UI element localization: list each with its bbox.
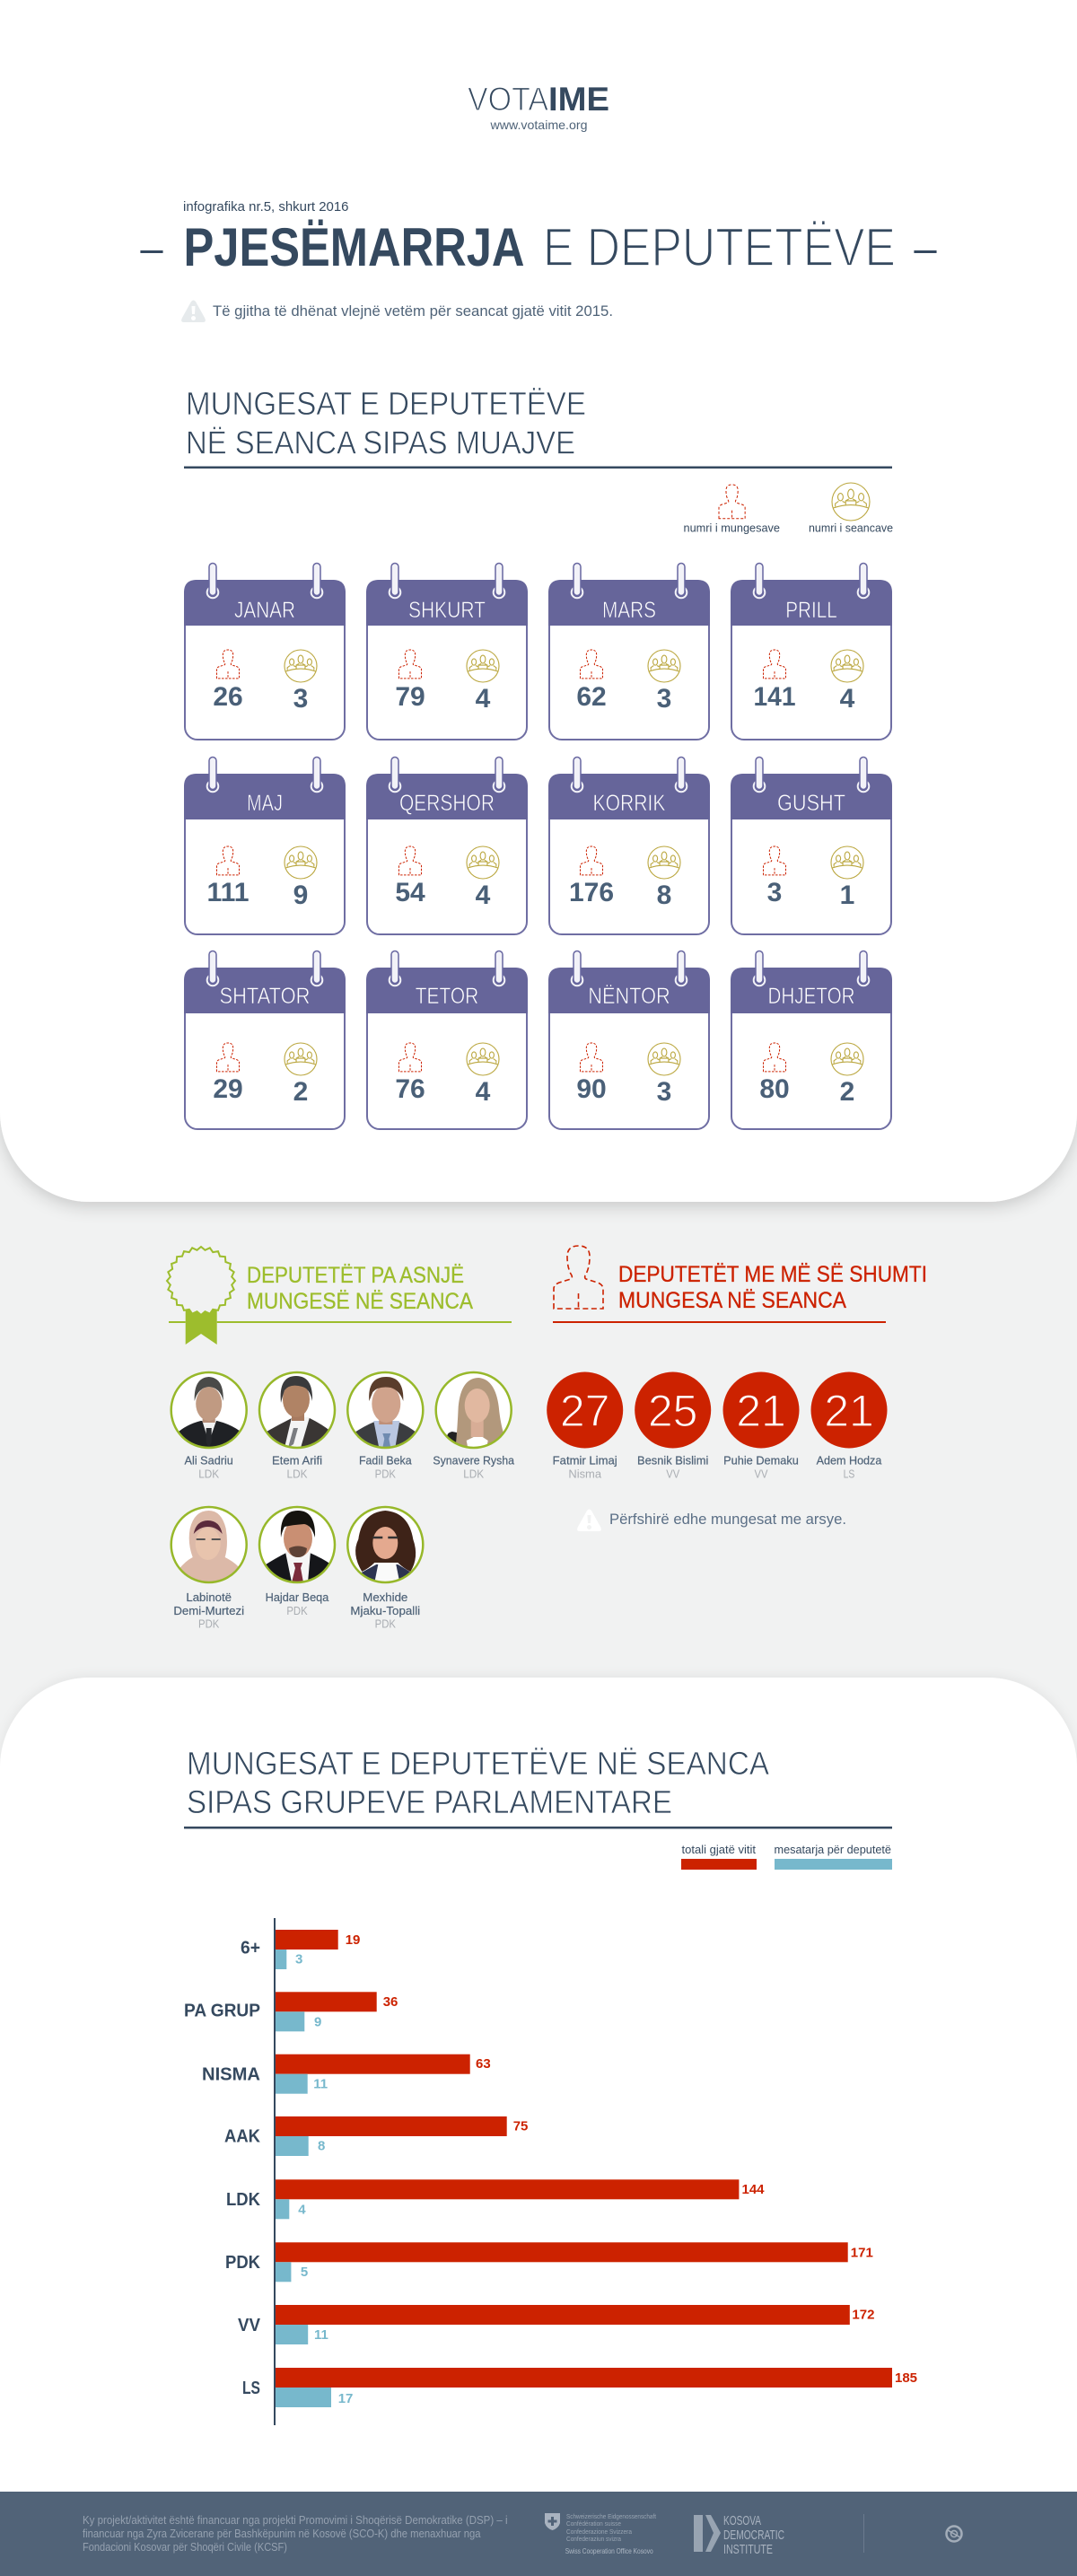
axis bbox=[274, 1918, 276, 2425]
calendar: SHKURT: SHKURT bbox=[408, 598, 486, 623]
calendar: KORRIK bbox=[548, 758, 710, 934]
icon: award rosette with ribbon bbox=[167, 1247, 512, 1345]
logo: Swiss Cooperation Office: Confédération suisse bbox=[566, 2521, 621, 2528]
badge: Besnik Bislimi 25 bbox=[635, 1371, 711, 1481]
names: second row bbox=[173, 1590, 420, 1630]
bars: LS bbox=[242, 2368, 917, 2407]
calendar: MAJ: 9 bbox=[293, 881, 308, 910]
title: – bbox=[914, 217, 937, 277]
panel: absences by parliamentary group bbox=[0, 1678, 1077, 2492]
logo: VOTAIME bbox=[468, 81, 609, 132]
logo: Swiss Cooperation Office: Swiss Cooperation Office Kosovo bbox=[565, 2547, 653, 2555]
names: first row: LDK bbox=[198, 1467, 219, 1481]
calendar: KORRIK: 176 bbox=[569, 878, 614, 907]
calendar: PRILL: PRILL bbox=[785, 598, 837, 623]
bars: NISMA bbox=[202, 2055, 491, 2094]
calendar: DHJETOR bbox=[731, 951, 892, 1129]
bars: PA GRUP: PA GRUP bbox=[184, 2002, 260, 2021]
calendar: DHJETOR: DHJETOR bbox=[768, 984, 854, 1009]
bar chart: absences by group bbox=[184, 1918, 917, 2425]
names: second row: Hajdar Beqa bbox=[266, 1590, 329, 1604]
bars: NISMA: 63 bbox=[476, 2056, 491, 2072]
names: second row: Mjaku-Topalli bbox=[350, 1604, 420, 1617]
names: first row: Etem Arifi bbox=[272, 1454, 322, 1467]
legend: months bbox=[684, 483, 893, 535]
bars: LDK: 144 bbox=[741, 2182, 765, 2197]
calendar: PRILL bbox=[731, 564, 892, 740]
note: data scope: Të gjitha të dhënat vlejnë vetëm për seancat gjatë vitit 2015. bbox=[213, 303, 613, 320]
calendar: SHTATOR: SHTATOR bbox=[219, 984, 311, 1009]
note: justified absences bbox=[577, 1510, 846, 1531]
calendar: JANAR: 26 bbox=[213, 682, 243, 712]
calendar: TETOR: 4 bbox=[476, 1077, 491, 1107]
heading: most absences: MUNGESA NË SEANCA bbox=[618, 1288, 846, 1313]
names: first row bbox=[185, 1454, 515, 1481]
calendar: NËNTOR: 3 bbox=[657, 1077, 671, 1107]
calendar: JANAR bbox=[184, 564, 346, 740]
calendar: NËNTOR bbox=[548, 951, 710, 1129]
calendar: MAJ bbox=[184, 758, 346, 934]
footer funding text bbox=[83, 2513, 508, 2554]
legend: bars: mesatarja për deputetë bbox=[774, 1843, 891, 1856]
calendar: TETOR: 76 bbox=[395, 1074, 425, 1104]
calendar: TETOR bbox=[366, 951, 528, 1129]
badge: Fatmir Limaj 27: Nisma bbox=[568, 1467, 602, 1481]
badge: Puhie Demaku 21: 21 bbox=[736, 1386, 786, 1436]
footer bbox=[0, 2492, 1077, 2576]
calendar: PRILL: 4 bbox=[840, 684, 855, 714]
badge: Puhie Demaku 21: Puhie Demaku bbox=[723, 1454, 799, 1467]
portrait: Ali Sadriu bbox=[171, 1372, 247, 1450]
bars: PDK bbox=[225, 2242, 873, 2282]
badge: Adem Hodza 21: Adem Hodza bbox=[817, 1454, 882, 1467]
calendar: GUSHT: 1 bbox=[840, 881, 854, 910]
badge: Besnik Bislimi 25: 25 bbox=[648, 1386, 698, 1436]
calendar: QERSHOR bbox=[366, 758, 528, 934]
badge: Besnik Bislimi 25: VV bbox=[666, 1467, 679, 1481]
legend: bars: totali gjatë vitit bbox=[682, 1843, 756, 1856]
logo: Swiss Cooperation Office: Confederaziun svizra bbox=[566, 2537, 621, 2543]
calendar: MARS: 3 bbox=[657, 684, 671, 714]
bars: PA GRUP: 36 bbox=[383, 1994, 398, 2010]
calendar: SHTATOR: 2 bbox=[293, 1077, 308, 1107]
badge: Fatmir Limaj 27: Fatmir Limaj bbox=[553, 1454, 617, 1467]
calendar: QERSHOR: 4 bbox=[476, 881, 491, 910]
names: second row: PDK bbox=[375, 1617, 396, 1630]
bars: 6+ bbox=[241, 1930, 360, 1969]
portrait: Mexhide Mjaku-Topalli bbox=[347, 1507, 423, 1584]
bars: VV: VV bbox=[238, 2316, 261, 2335]
names: first row: Synavere Rysha bbox=[433, 1454, 515, 1467]
portrait: Fadil Beka bbox=[347, 1372, 423, 1450]
title bbox=[140, 217, 937, 277]
heading: absences by month: NË SEANCA SIPAS MUAJVE bbox=[186, 424, 575, 461]
names: second row: PDK bbox=[286, 1604, 308, 1617]
bars: LS: LS bbox=[242, 2379, 260, 2398]
calendar: DHJETOR: 2 bbox=[840, 1077, 854, 1107]
logo: Swiss Cooperation Office bbox=[545, 2513, 656, 2555]
names: first row: Fadil Beka bbox=[359, 1454, 412, 1467]
names: first row: LDK bbox=[287, 1467, 308, 1481]
heading: most absences bbox=[553, 1262, 927, 1323]
heading: absences by group bbox=[184, 1745, 892, 1829]
bars: NISMA: 11 bbox=[313, 2077, 328, 2092]
portrait: Hajdar Beqa bbox=[259, 1507, 335, 1584]
logo: swirl mark bbox=[946, 2526, 962, 2542]
legend: months: numri i mungesave bbox=[684, 522, 780, 535]
bars: AAK: 8 bbox=[318, 2139, 325, 2154]
calendar: MAJ: 111 bbox=[206, 878, 250, 907]
logo: Swiss Cooperation Office: Confederazione Svizzera bbox=[566, 2529, 632, 2536]
calendar: GUSHT bbox=[731, 758, 892, 934]
heading: absences by month bbox=[184, 385, 892, 469]
bars: VV: 11 bbox=[314, 2327, 328, 2343]
footer funding text: Fondacioni Kosovar për Shoqëri Civile (KCSF) bbox=[83, 2540, 287, 2554]
title: PJESËMARRJA bbox=[183, 217, 524, 277]
calendar: QERSHOR: QERSHOR bbox=[399, 791, 495, 816]
names: first row: Ali Sadriu bbox=[185, 1454, 233, 1467]
issue label: infografika nr.5, shkurt 2016 bbox=[183, 199, 348, 215]
footer funding text: financuar nga Zyra Zvicerane për Bashkëpunim në Kosovë (SCO-K) dhe menaxhuar nga bbox=[83, 2527, 481, 2540]
bars: LS: 17 bbox=[338, 2391, 353, 2406]
calendar: PRILL: 141 bbox=[754, 682, 795, 712]
bars: AAK bbox=[224, 2116, 528, 2156]
bars: PA GRUP bbox=[184, 1992, 398, 2031]
names: second row: Labinotë bbox=[186, 1590, 232, 1604]
title: – bbox=[140, 217, 163, 277]
calendar: GUSHT: 3 bbox=[767, 878, 782, 907]
names: first row: LDK bbox=[463, 1467, 484, 1481]
logo: VOTAIME: IME bbox=[548, 81, 609, 118]
calendar: SHKURT bbox=[366, 564, 528, 740]
calendar: SHKURT: 79 bbox=[395, 682, 425, 712]
bars: 6+: 19 bbox=[346, 1932, 360, 1948]
calendar: JANAR: JANAR bbox=[234, 598, 295, 623]
heading: absences by group: MUNGESAT E DEPUTETËVE NË SEANCA bbox=[187, 1745, 769, 1782]
bars: LDK: LDK bbox=[226, 2190, 261, 2210]
logo: VOTAIME: VOTA bbox=[468, 81, 548, 118]
portrait: Etem Arifi bbox=[259, 1372, 335, 1450]
names: first row: PDK bbox=[375, 1467, 396, 1481]
calendar: NËNTOR: 90 bbox=[576, 1074, 607, 1104]
bars: PDK: PDK bbox=[225, 2253, 261, 2273]
panel: monthly absences bbox=[0, 0, 1077, 1202]
bars: 6+: 3 bbox=[295, 1951, 302, 1967]
badge: Puhie Demaku 21: VV bbox=[754, 1467, 768, 1481]
calendar: KORRIK: 8 bbox=[657, 881, 671, 910]
panel: deputies without absences bbox=[167, 1247, 515, 1630]
logo: Kosova Democratic Institute: INSTITUTE bbox=[723, 2542, 773, 2557]
footer funding text: Ky projekt/aktivitet është financuar nga projekti Promovimi i Shoqërisë Demokratike (DSP) – i bbox=[83, 2513, 508, 2527]
calendar: MARS: 62 bbox=[576, 682, 607, 712]
names: second row: PDK bbox=[198, 1617, 220, 1630]
badge: Besnik Bislimi 25: Besnik Bislimi bbox=[637, 1454, 708, 1467]
calendar: SHTATOR: 29 bbox=[213, 1074, 243, 1104]
calendar: DHJETOR: 80 bbox=[759, 1074, 790, 1104]
bars: PA GRUP: 9 bbox=[314, 2014, 321, 2029]
note: data scope bbox=[181, 300, 613, 322]
bars: LDK bbox=[226, 2179, 765, 2219]
calendar: QERSHOR: 54 bbox=[395, 878, 425, 907]
calendar: SHKURT: 4 bbox=[476, 684, 491, 714]
panel: deputies with most absences bbox=[547, 1246, 927, 1531]
heading: no absences: DEPUTETËT PA ASNJË bbox=[247, 1263, 464, 1288]
bars: AAK: 75 bbox=[513, 2118, 528, 2134]
calendar: MAJ: MAJ bbox=[247, 791, 283, 816]
bars: NISMA: NISMA bbox=[202, 2064, 260, 2084]
heading: absences by month: MUNGESAT E DEPUTETËVE bbox=[186, 385, 586, 422]
calendar: MARS: MARS bbox=[602, 598, 656, 623]
bars: AAK: AAK bbox=[224, 2127, 261, 2147]
portrait: Labinotë Demi-Murtezi bbox=[171, 1507, 247, 1584]
logo: Kosova Democratic Institute: DEMOCRATIC bbox=[723, 2528, 784, 2543]
legend: bars bbox=[681, 1843, 892, 1870]
heading: most absences: DEPUTETËT ME MË SË SHUMTI bbox=[618, 1262, 927, 1287]
title: E DEPUTETËVE bbox=[543, 217, 896, 277]
badge: Puhie Demaku 21 bbox=[723, 1371, 799, 1481]
badge: Adem Hodza 21: LS bbox=[844, 1467, 855, 1481]
heading: no absences bbox=[247, 1263, 473, 1314]
calendar: JANAR: 3 bbox=[293, 684, 308, 714]
bars: LS: 185 bbox=[895, 2370, 917, 2386]
bars: PDK: 171 bbox=[851, 2245, 873, 2260]
legend: months: numri i seancave bbox=[809, 522, 893, 535]
calendar: SHTATOR bbox=[184, 951, 346, 1129]
badge: Adem Hodza 21: 21 bbox=[824, 1386, 874, 1436]
calendar: GUSHT: GUSHT bbox=[777, 791, 845, 816]
icon: absent person bbox=[554, 1246, 603, 1309]
note: justified absences: Përfshirë edhe mungesat me arsye. bbox=[609, 1511, 846, 1528]
logo: Kosova Democratic Institute: KOSOVA bbox=[723, 2513, 761, 2528]
badge: Fatmir Limaj 27: 27 bbox=[560, 1386, 610, 1436]
calendar: TETOR: TETOR bbox=[416, 984, 478, 1009]
heading: absences by group: SIPAS GRUPEVE PARLAMENTARE bbox=[187, 1783, 672, 1820]
names: second row: Demi-Murtezi bbox=[173, 1604, 244, 1617]
bars: LDK: 4 bbox=[298, 2203, 306, 2218]
calendar: KORRIK: KORRIK bbox=[592, 791, 666, 816]
portrait: Synavere Rysha bbox=[436, 1372, 512, 1450]
bars: 6+: 6+ bbox=[241, 1939, 260, 1958]
badge: Adem Hodza 21 bbox=[811, 1371, 887, 1481]
logo: Kosova Democratic Institute bbox=[694, 2513, 784, 2557]
logo: Swiss Cooperation Office: Schweizerische Eidgenossenschaft bbox=[566, 2514, 656, 2520]
calendar: NËNTOR: NËNTOR bbox=[588, 984, 670, 1009]
names: second row: Mexhide bbox=[363, 1590, 407, 1604]
badge: Fatmir Limaj 27 bbox=[547, 1371, 623, 1481]
heading: no absences: MUNGESË NË SEANCA bbox=[247, 1289, 473, 1314]
bars: VV: 172 bbox=[852, 2307, 874, 2322]
bars: PDK: 5 bbox=[301, 2265, 308, 2280]
calendar: MARS bbox=[548, 564, 710, 740]
bars: VV bbox=[238, 2305, 874, 2344]
logo: VOTAIME: www.votaime.org bbox=[489, 118, 587, 132]
